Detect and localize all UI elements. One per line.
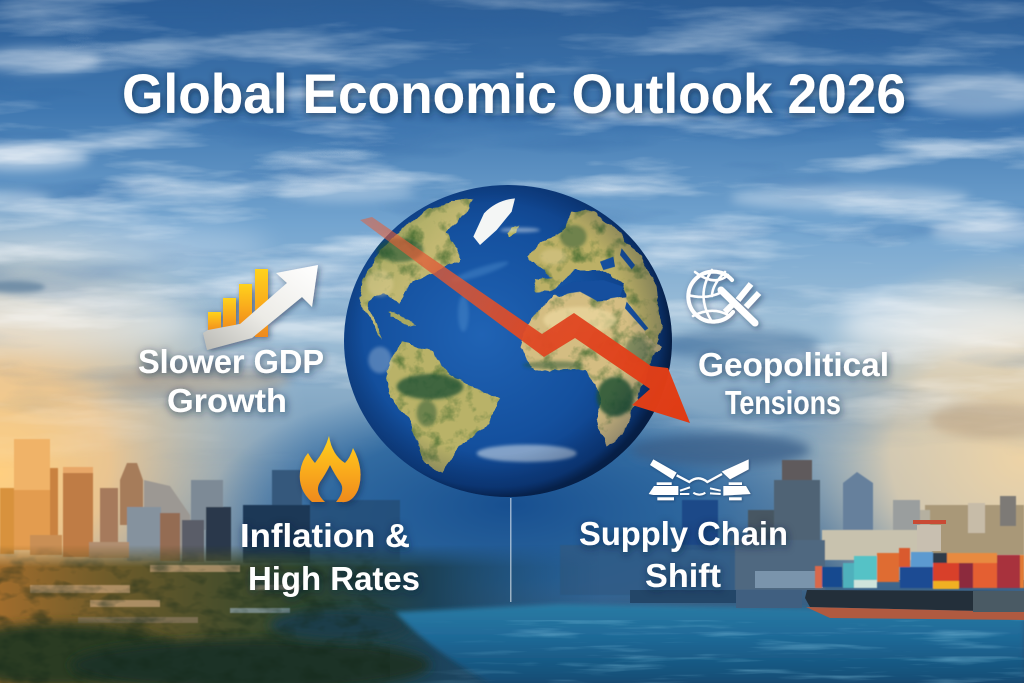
left town and trees	[0, 545, 600, 683]
label: Geopolitical	[698, 346, 889, 383]
seas	[547, 248, 648, 331]
label: High Rates	[248, 560, 420, 597]
hull stripe	[806, 607, 1024, 620]
greenland	[473, 198, 515, 245]
ocean highlights	[458, 261, 508, 332]
dark forest patches	[377, 225, 648, 427]
streaky cloud texture	[0, 0, 1024, 470]
icon: globe with crossed bars	[688, 270, 759, 323]
red downward arrow	[360, 217, 690, 423]
ship hull	[805, 590, 1024, 612]
bridge tower	[913, 520, 946, 551]
warm glow right	[620, 230, 1024, 580]
continents	[359, 199, 662, 472]
icon: flame	[300, 436, 361, 502]
block: supply chain shift	[579, 459, 788, 594]
blue haze centre	[210, 380, 810, 630]
warm sunset glow left	[0, 180, 480, 600]
container ship	[630, 520, 1024, 620]
limb shading	[344, 185, 672, 497]
label: Shift	[645, 557, 721, 594]
iceland	[507, 227, 518, 236]
small ships	[630, 571, 823, 608]
label: Tensions	[725, 384, 841, 421]
waves	[400, 620, 1024, 683]
dusky clouds	[0, 281, 1024, 466]
right city skyline	[560, 460, 1024, 595]
left city skyline	[0, 439, 400, 563]
block: slower GDP growth	[138, 265, 324, 419]
north america	[359, 199, 473, 340]
globe	[344, 185, 672, 497]
label: Slower GDP	[138, 343, 324, 380]
label: Growth	[167, 382, 287, 419]
label: Inflation &	[240, 517, 410, 554]
block: geopolitical tensions	[688, 270, 889, 421]
water	[395, 604, 1024, 683]
clouds	[0, 47, 1024, 355]
thin vertical light line	[510, 498, 512, 602]
icon: broken chain with ships	[649, 459, 751, 500]
icon: rising bars and arrow	[203, 265, 318, 350]
europe and asia	[525, 208, 662, 345]
caribbean islands	[390, 312, 415, 325]
desert highlights	[367, 249, 617, 333]
africa	[520, 289, 660, 447]
block: inflation and high rates	[240, 436, 420, 597]
label: Supply Chain	[579, 515, 788, 552]
south america	[385, 342, 501, 472]
title: Global Economic Outlook 2026	[122, 62, 906, 125]
south clouds	[368, 228, 577, 462]
containers	[815, 548, 1024, 589]
ocean	[344, 185, 672, 497]
